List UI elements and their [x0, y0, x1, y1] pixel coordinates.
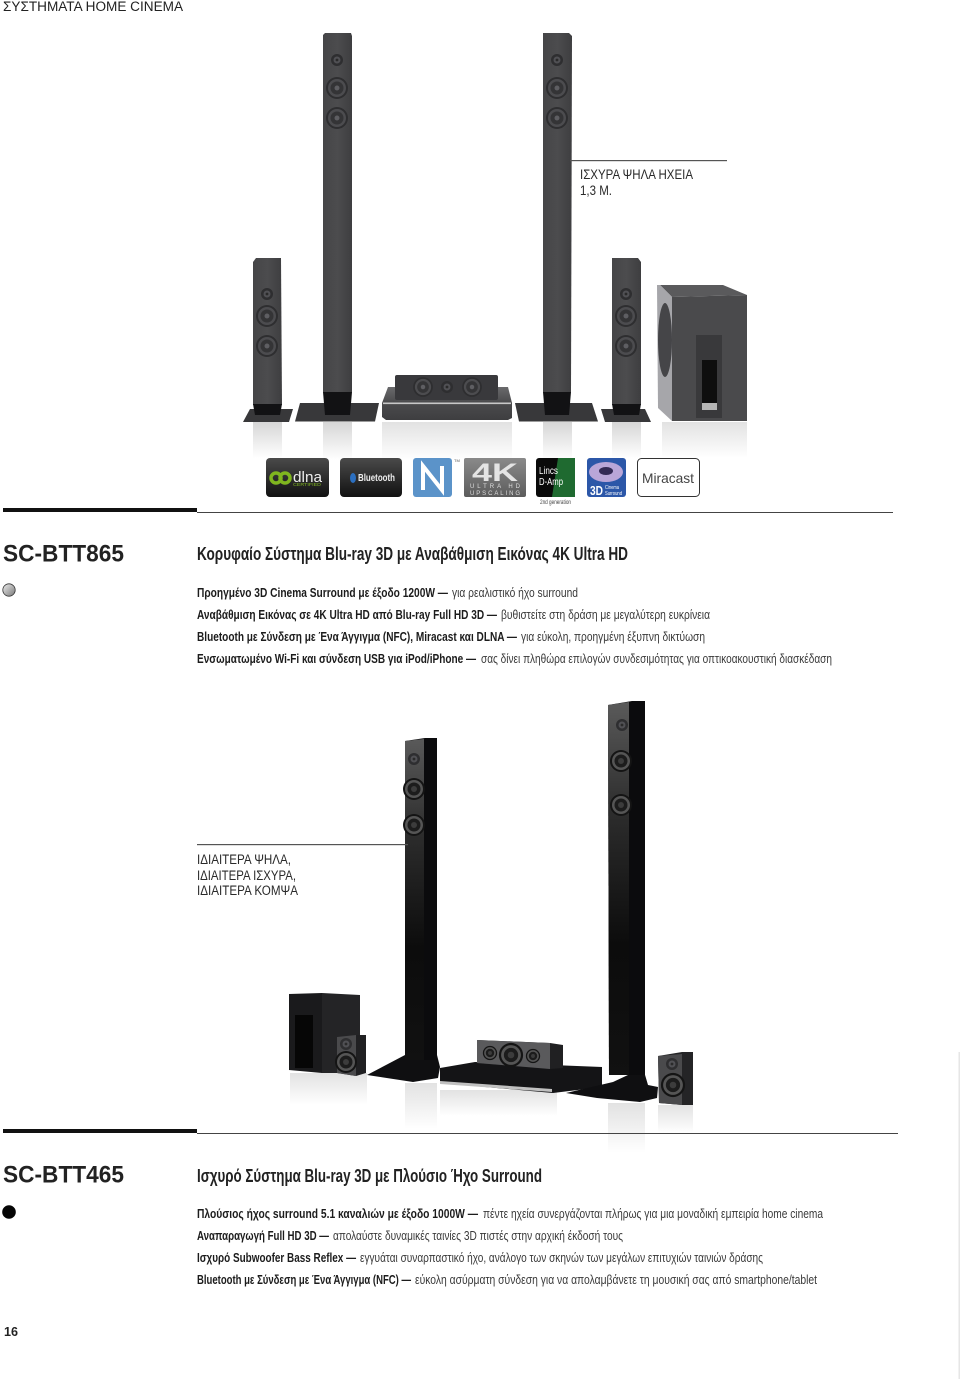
tall speaker right [566, 701, 658, 1102]
colour swatch: black [2, 1205, 16, 1219]
feature list: SC-BTT865: Bluetooth με Σύνδεση με Ένα Άγγιγμα (NFC), Miracast και DLNA — [197, 629, 517, 644]
logo: dlna: dlna [293, 469, 323, 486]
floor reflections [253, 422, 747, 460]
logo: Lincs D-Amp [536, 458, 575, 506]
divider: SC-BTT465 [3, 1129, 898, 1134]
feature list: SC-BTT465: Πλούσιος ήχος surround 5.1 καναλιών με έξοδο 1000W — [197, 1206, 478, 1221]
feature list: SC-BTT865 [197, 585, 832, 666]
tall speaker left [295, 33, 379, 422]
feature list: SC-BTT465: εγγυάται συναρπαστικό ήχο, ανάλογο των σκηνών των μεγάλων επιτυχιών ταινιών δράσης [360, 1250, 763, 1265]
callout: tall speakers: ΙΣΧΥΡΑ ΨΗΛΑ ΗΧΕΙΑ [580, 167, 693, 182]
subwoofer [289, 993, 360, 1073]
small speaker right [658, 1052, 693, 1105]
logo: 3D Cinema Surround: 3D [590, 483, 603, 498]
logo: 3D Cinema Surround [587, 458, 626, 498]
feature list: SC-BTT465: Ισχυρό Subwoofer Bass Reflex — [197, 1250, 356, 1265]
tall speaker right [515, 33, 598, 422]
logo: NFC [413, 458, 460, 497]
callout: slim speakers: ΙΔΙΑΙΤΕΡΑ ΚΟΜΨΑ [197, 883, 298, 898]
logo: NFC: TM [454, 458, 460, 463]
logo: 4K Ultra HD: ULTRA HD [470, 484, 521, 490]
logo: Lincs D-Amp: D-Amp [539, 477, 563, 488]
logo: dlna: CERTIFIED [293, 482, 322, 487]
callout: tall speakers [570, 160, 727, 198]
logo: 3D Cinema Surround: Surround [605, 491, 622, 497]
feature list: SC-BTT465: απολαύστε δυναμικές ταινίες 3D πιστές στην αρχική έκδοσή τους [333, 1228, 623, 1243]
feature list: SC-BTT465: Bluetooth με Σύνδεση με Ένα Άγγιγμα (NFC) — [197, 1272, 411, 1287]
logo: 4K Ultra HD [464, 458, 526, 497]
feature list: SC-BTT865: για ρεαλιστικό ήχο surround [452, 585, 578, 600]
subwoofer [657, 285, 747, 421]
logo: Bluetooth [340, 458, 402, 497]
callout: slim speakers [197, 844, 408, 898]
divider: SC-BTT865 [3, 508, 893, 513]
floor reflections [290, 1073, 693, 1153]
small speaker left [243, 258, 293, 422]
heading: SC-BTT465: Ισχυρό Σύστημα Blu-ray 3D με Πλούσιο Ήχο Surround [197, 1166, 542, 1186]
logo: Lincs D-Amp: 2nd generation [540, 500, 571, 506]
page number: 16 [4, 1325, 18, 1339]
logo: dlna [266, 458, 329, 497]
logo: Miracast [638, 458, 700, 496]
feature list: SC-BTT865: Προηγμένο 3D Cinema Surround με έξοδο 1200W — [197, 585, 448, 600]
feature logos row [266, 458, 700, 506]
logo: Miracast: Miracast [642, 470, 694, 486]
feature list: SC-BTT865: για εύκολη, προηγμένη έξυπνη δικτύωση [521, 629, 705, 644]
feature list: SC-BTT865: βυθιστείτε στη δράση με μεγαλύτερη ευκρίνεια [501, 607, 710, 622]
model name: SC-BTT865: SC-BTT865 [3, 540, 124, 568]
feature list: SC-BTT465: Αναπαραγωγή Full HD 3D — [197, 1228, 329, 1243]
callout: tall speakers: 1,3 Μ. [580, 183, 612, 198]
logo: 4K Ultra HD: 4K [472, 459, 518, 487]
callout: slim speakers: ΙΔΙΑΙΤΕΡΑ ΙΣΧΥΡΑ, [197, 868, 296, 883]
colour swatch: silver [3, 584, 15, 596]
product photo: SC-BTT465 speaker set [289, 701, 693, 1153]
logo: 4K Ultra HD: UPSCALING [470, 491, 520, 497]
feature list: SC-BTT865: σας δίνει πληθώρα επιλογών συνδεσιμότητας για οπτικοακουστική διασκέδαση [481, 651, 832, 666]
small speaker right [601, 258, 651, 422]
feature list: SC-BTT465: εύκολη ασύρματη σύνδεση για να απολαμβάνετε τη μουσική σας από smartphone/tablet [415, 1272, 817, 1287]
product photo: SC-BTT865 speaker set [243, 33, 747, 460]
model name: SC-BTT465: SC-BTT465 [3, 1162, 124, 1188]
feature list: SC-BTT465 [197, 1206, 824, 1287]
feature list: SC-BTT865: Αναβάθμιση Εικόνας σε 4K Ultra HD από Blu-ray Full HD 3D — [197, 607, 497, 622]
tall speaker left [367, 738, 440, 1082]
logo: Lincs D-Amp: Lincs [539, 466, 558, 477]
heading: SC-BTT865: Κορυφαίο Σύστημα Blu-ray 3D με Αναβάθμιση Εικόνας 4K Ultra HD [197, 544, 628, 564]
receiver and centre speaker [382, 375, 512, 420]
small speaker left [335, 1035, 366, 1076]
logo: Bluetooth: Bluetooth [358, 473, 395, 484]
feature list: SC-BTT865: Ενσωματωμένο Wi-Fi και σύνδεση USB για iPod/iPhone — [197, 651, 476, 666]
callout: slim speakers: ΙΔΙΑΙΤΕΡΑ ΨΗΛΑ, [197, 852, 291, 867]
feature list: SC-BTT465: πέντε ηχεία συνεργάζονται πλήρως για μια μοναδική εμπειρία home cinema [483, 1206, 824, 1221]
logo: 3D Cinema Surround: Cinema [605, 485, 619, 491]
receiver and centre speaker [440, 1040, 602, 1093]
